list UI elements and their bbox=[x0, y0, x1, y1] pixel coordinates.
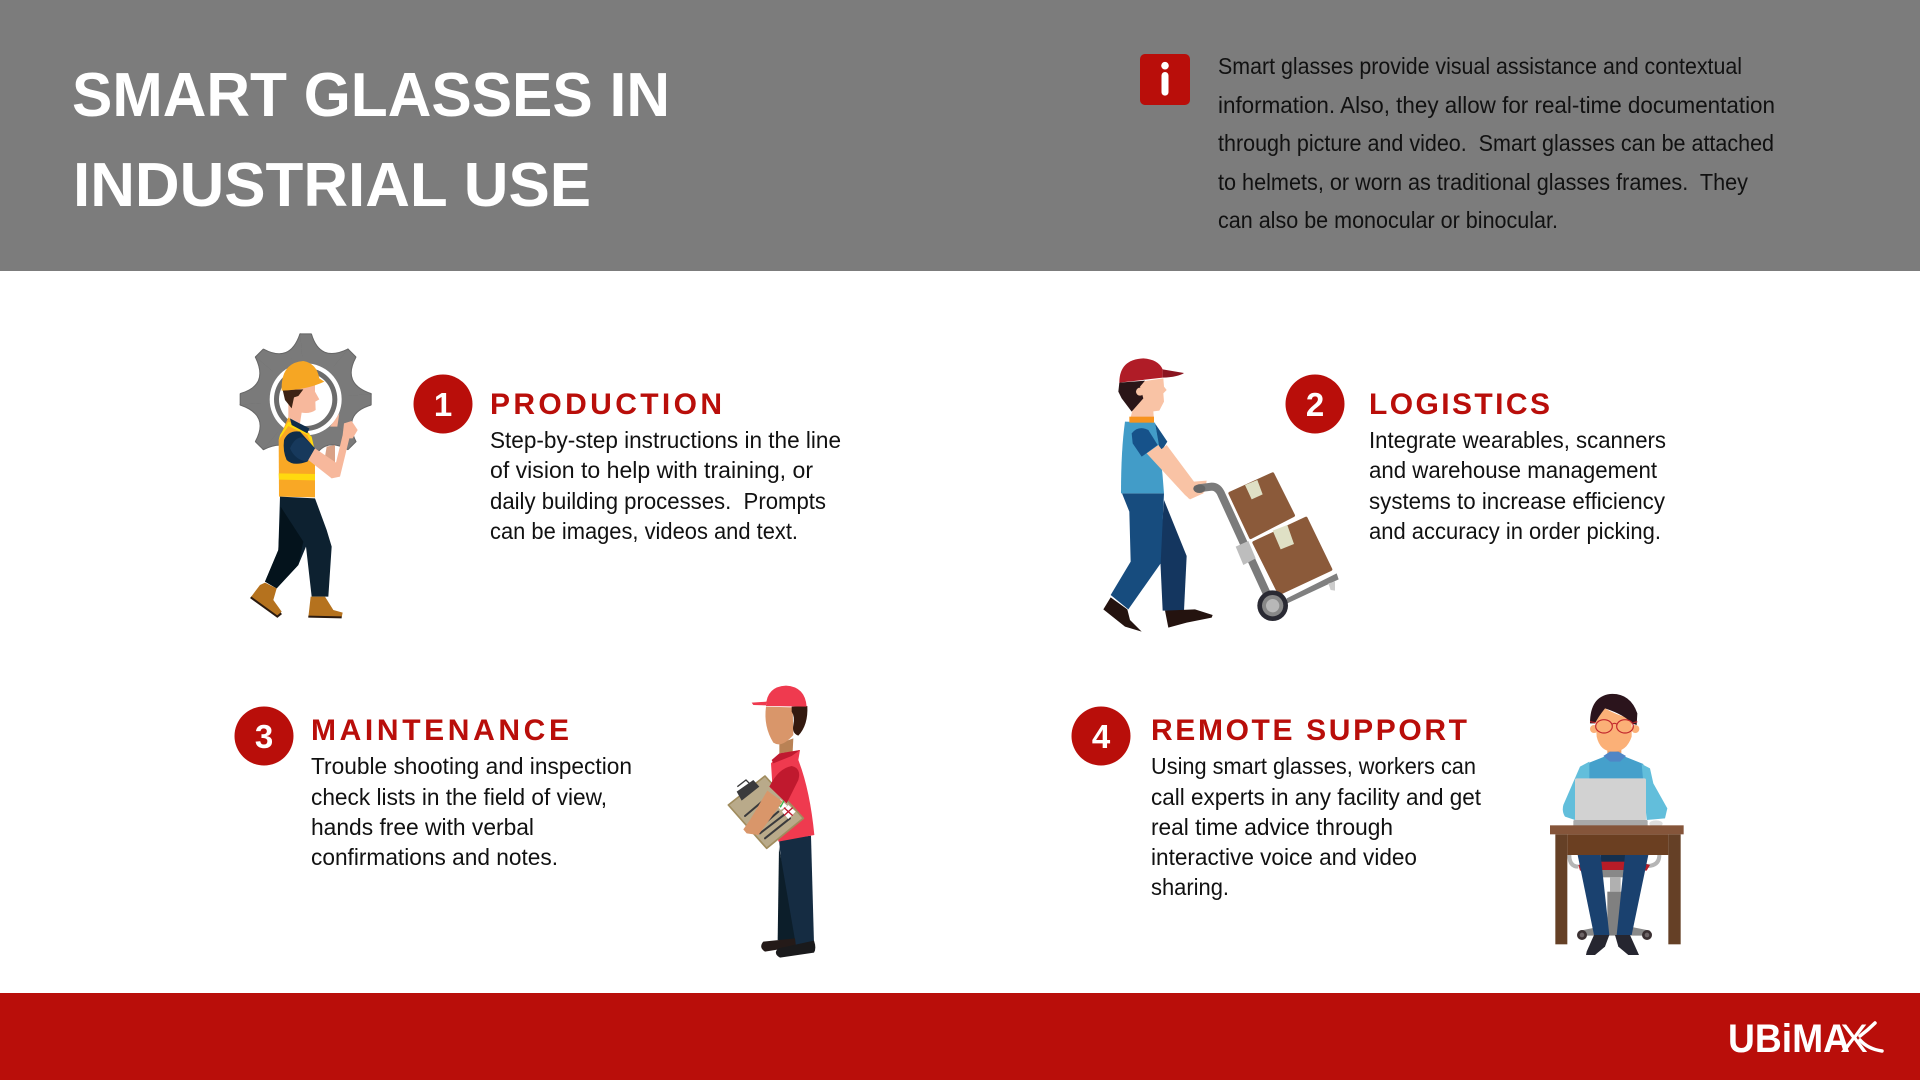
number badge 3 bbox=[234, 706, 294, 766]
panel: remote support bbox=[1072, 694, 1684, 955]
body: maintenance bbox=[311, 753, 632, 870]
illustration: worker with clipboard bbox=[728, 686, 815, 958]
body: remote support: sharing. bbox=[1151, 874, 1229, 900]
intro text: information. Also, they allow for real-time documentation bbox=[1218, 92, 1775, 118]
number badge 4: 4 bbox=[1092, 718, 1111, 755]
panel: production bbox=[230, 324, 841, 617]
body: remote support: call experts in any facility and get bbox=[1151, 784, 1482, 810]
intro text: to helmets, or worn as traditional glasses frames. They bbox=[1218, 169, 1748, 195]
heading: remote support: REMOTE SUPPORT bbox=[1151, 714, 1467, 747]
illustration: worker with hand truck bbox=[1103, 358, 1339, 632]
heading: logistics: LOGISTICS bbox=[1369, 388, 1550, 421]
body: remote support bbox=[1151, 753, 1482, 900]
body: logistics: Integrate wearables, scanners bbox=[1369, 427, 1666, 453]
body: remote support: Using smart glasses, workers can bbox=[1151, 753, 1476, 779]
number badge 2: 2 bbox=[1306, 386, 1324, 423]
body: production: of vision to help with training, or bbox=[490, 457, 813, 483]
number badge 1: 1 bbox=[434, 386, 452, 423]
body: production: Step-by-step instructions in the line bbox=[490, 427, 841, 453]
body: maintenance: confirmations and notes. bbox=[311, 844, 558, 870]
number badge 4 bbox=[1072, 706, 1130, 766]
logo: UBiMAX: UBiMA bbox=[1728, 1017, 1850, 1061]
panel: logistics bbox=[1103, 358, 1666, 632]
body: maintenance: Trouble shooting and inspection bbox=[311, 753, 632, 779]
icon: info bbox=[1140, 54, 1190, 105]
panel: maintenance bbox=[234, 686, 815, 958]
intro text: Smart glasses provide visual assistance and contextual bbox=[1218, 53, 1742, 79]
logo: UBiMAX: X bbox=[1840, 1017, 1868, 1061]
body: maintenance: hands free with verbal bbox=[311, 814, 534, 840]
body: logistics: and accuracy in order picking. bbox=[1369, 518, 1661, 544]
title bbox=[72, 61, 670, 220]
intro text bbox=[1218, 53, 1775, 233]
number badge 2 bbox=[1286, 374, 1344, 434]
body: production bbox=[490, 427, 841, 544]
body: production: daily building processes. Prompts bbox=[490, 488, 826, 514]
title: INDUSTRIAL USE bbox=[73, 151, 591, 220]
illustration: worker at laptop desk bbox=[1550, 694, 1684, 955]
body: remote support: real time advice through bbox=[1151, 814, 1393, 840]
body: maintenance: check lists in the field of view, bbox=[311, 784, 607, 810]
heading: production: PRODUCTION bbox=[490, 388, 722, 421]
title: SMART GLASSES IN bbox=[72, 61, 670, 130]
header band bbox=[0, 0, 1920, 271]
body: remote support: interactive voice and video bbox=[1151, 844, 1417, 870]
heading: maintenance: MAINTENANCE bbox=[311, 714, 569, 747]
number badge 1 bbox=[414, 374, 472, 434]
number badge 3: 3 bbox=[255, 718, 273, 755]
body: logistics bbox=[1369, 427, 1666, 544]
intro text: through picture and video. Smart glasses can be attached bbox=[1218, 130, 1774, 156]
body: production: can be images, videos and text. bbox=[490, 518, 798, 544]
footer band bbox=[0, 993, 1920, 1080]
illustration: worker with gear bbox=[230, 324, 381, 617]
body: logistics: systems to increase efficiency bbox=[1369, 488, 1665, 514]
intro text: can also be monocular or binocular. bbox=[1218, 207, 1558, 233]
body: logistics: and warehouse management bbox=[1369, 457, 1658, 483]
